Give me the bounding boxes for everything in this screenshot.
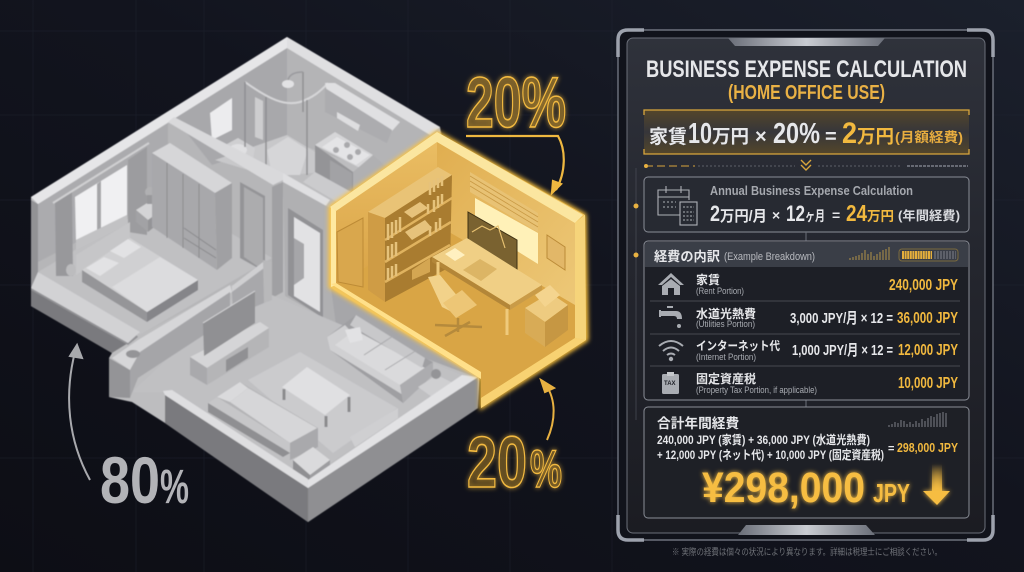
row: internet: インターネット代 [696, 339, 780, 353]
annual calculation box: Annual Business Expense Calculation [710, 184, 913, 198]
row: utilities: 36,000 JPY [897, 310, 958, 327]
row: property tax [662, 371, 958, 395]
annual calculation box: 万円/月 [720, 208, 767, 225]
wall top bands [330, 132, 583, 223]
bed [76, 222, 130, 275]
sofa lower [208, 382, 318, 453]
bathroom and kitchen [175, 48, 430, 202]
annual calculation box: 2 [710, 201, 720, 226]
callout: 80%: % [160, 461, 189, 514]
desk [432, 238, 542, 305]
door [240, 182, 265, 272]
total box: 240,000 JPY (家賃) + 36,000 JPY (水道光熱費) [657, 432, 870, 447]
total box: 合計年間経費 [657, 415, 739, 431]
grand total: ¥298,000 [702, 464, 865, 512]
monthly formula box: 万円 [857, 126, 894, 147]
row: internet: (Internet Portion) [696, 352, 756, 362]
annual calculation box: 万円 [867, 209, 894, 224]
apartment base silhouette [31, 37, 480, 522]
icon: faucet [659, 306, 682, 328]
tv [203, 291, 255, 356]
icon: calendar and calculator [658, 186, 697, 225]
wall tops living [163, 375, 478, 488]
footnote: ※ 実際の経費は個々の状況により異なります。詳細は税理士にご相談ください。 [672, 546, 942, 557]
callout: 20% bottom: % [530, 440, 562, 499]
wardrobe [152, 143, 232, 193]
row: utilities [659, 306, 958, 329]
picture frame [547, 235, 565, 270]
row: rent: (Rent Portion) [696, 286, 744, 296]
monthly formula box: 20% [773, 118, 820, 150]
side tables [293, 447, 330, 475]
coffee table [282, 367, 350, 415]
annual calculation box: ヶ月 [805, 208, 825, 224]
highlighted gold room 20% [330, 132, 587, 408]
nightstands [136, 200, 163, 220]
arrow up to gold room [541, 380, 554, 440]
total box: 298,000 JPY [897, 441, 959, 455]
sink [216, 138, 255, 165]
annual calculation box: 24 [846, 200, 867, 226]
monitor [468, 212, 517, 270]
total box: = [888, 443, 894, 455]
icon: wifi [659, 341, 683, 360]
icon: down arrow [923, 464, 950, 505]
row: property tax: (Property Tax Portion, if applicable) [696, 385, 817, 395]
glow [330, 132, 587, 408]
callout: 20% top [466, 64, 566, 193]
row: utilities: 3,000 JPY/月 × 12 = [790, 310, 893, 327]
callout: 80%: 80 [100, 443, 160, 517]
chair [428, 275, 459, 315]
monthly formula box: = [825, 126, 837, 148]
total box: + 12,000 JPY (ネット代) + 10,000 JPY (固定資産税) [657, 447, 884, 462]
row: rent: 240,000 JPY [889, 277, 959, 294]
arrow to gold room [466, 136, 564, 193]
table header: (Example Breakdown) [724, 251, 815, 263]
monthly formula box: × [755, 126, 767, 148]
row: property tax: 固定資産税 [696, 371, 756, 386]
table header: 経費の内訳 [654, 248, 720, 264]
gold left wall [336, 142, 437, 285]
row: rent [658, 272, 959, 296]
monthly formula box: 万円 [712, 126, 749, 147]
total box: JPY [873, 478, 910, 508]
bathroom window [210, 98, 232, 140]
annual calculation box: 12 [786, 201, 805, 226]
gold floor [336, 225, 575, 398]
breakdown table [644, 241, 969, 400]
outer front faces [31, 200, 478, 522]
curtains [55, 192, 73, 276]
gold right wall [437, 142, 575, 308]
row: utilities: 水道光熱費 [696, 306, 756, 321]
sofa upper right [327, 315, 433, 403]
annual calculation box: (年間経費) [898, 208, 960, 223]
icon: tax clipboard [662, 372, 679, 394]
bedroom [38, 123, 283, 335]
monthly formula box: 2 [842, 117, 857, 150]
icon: tax clipboard: TAX [664, 381, 676, 387]
annual calculation box [644, 177, 969, 232]
panel frame [618, 30, 993, 540]
callout: 20% bottom [467, 380, 562, 503]
window [75, 165, 127, 240]
icon: house [658, 273, 684, 295]
panel: expense calculation [618, 30, 993, 540]
callout: 80% [69, 345, 189, 517]
callout: 20% top: 20% [466, 64, 566, 143]
window and blind [475, 198, 538, 264]
monthly formula box: 家賃 [649, 126, 687, 148]
monthly formula box [644, 110, 969, 154]
living room [112, 260, 462, 484]
callout: 20% bottom: 20 [467, 423, 527, 503]
total box [644, 407, 969, 518]
monthly formula box: 10 [688, 118, 712, 150]
floor plan: gray apartment 80% [31, 37, 480, 522]
connector with chevrons [634, 160, 968, 420]
plant [126, 350, 140, 358]
door [337, 218, 363, 287]
row: utilities: (Utilities Portion) [696, 319, 755, 329]
arrow up to gray rooms [69, 345, 90, 480]
rug [248, 352, 397, 453]
row: rent: 家賃 [696, 272, 720, 287]
row: internet [659, 339, 958, 362]
kitchen cabinets [325, 83, 400, 131]
annual calculation box: = [832, 207, 840, 223]
subtitle: (HOME OFFICE USE) [728, 82, 885, 104]
console [350, 408, 398, 447]
tv stand [190, 322, 269, 368]
row: property tax: 10,000 JPY [898, 375, 958, 392]
monthly formula box: (月額経費) [895, 129, 963, 145]
row: internet: 12,000 JPY [898, 342, 958, 359]
table header [645, 242, 968, 267]
shower [245, 82, 328, 103]
annual calculation box: × [772, 207, 780, 223]
wall tops [31, 37, 440, 343]
row: internet: 1,000 JPY/月 × 12 = [792, 342, 893, 359]
dividing wall with doorway [272, 182, 478, 378]
drawer cabinet [525, 293, 568, 322]
bookshelf [368, 167, 452, 302]
